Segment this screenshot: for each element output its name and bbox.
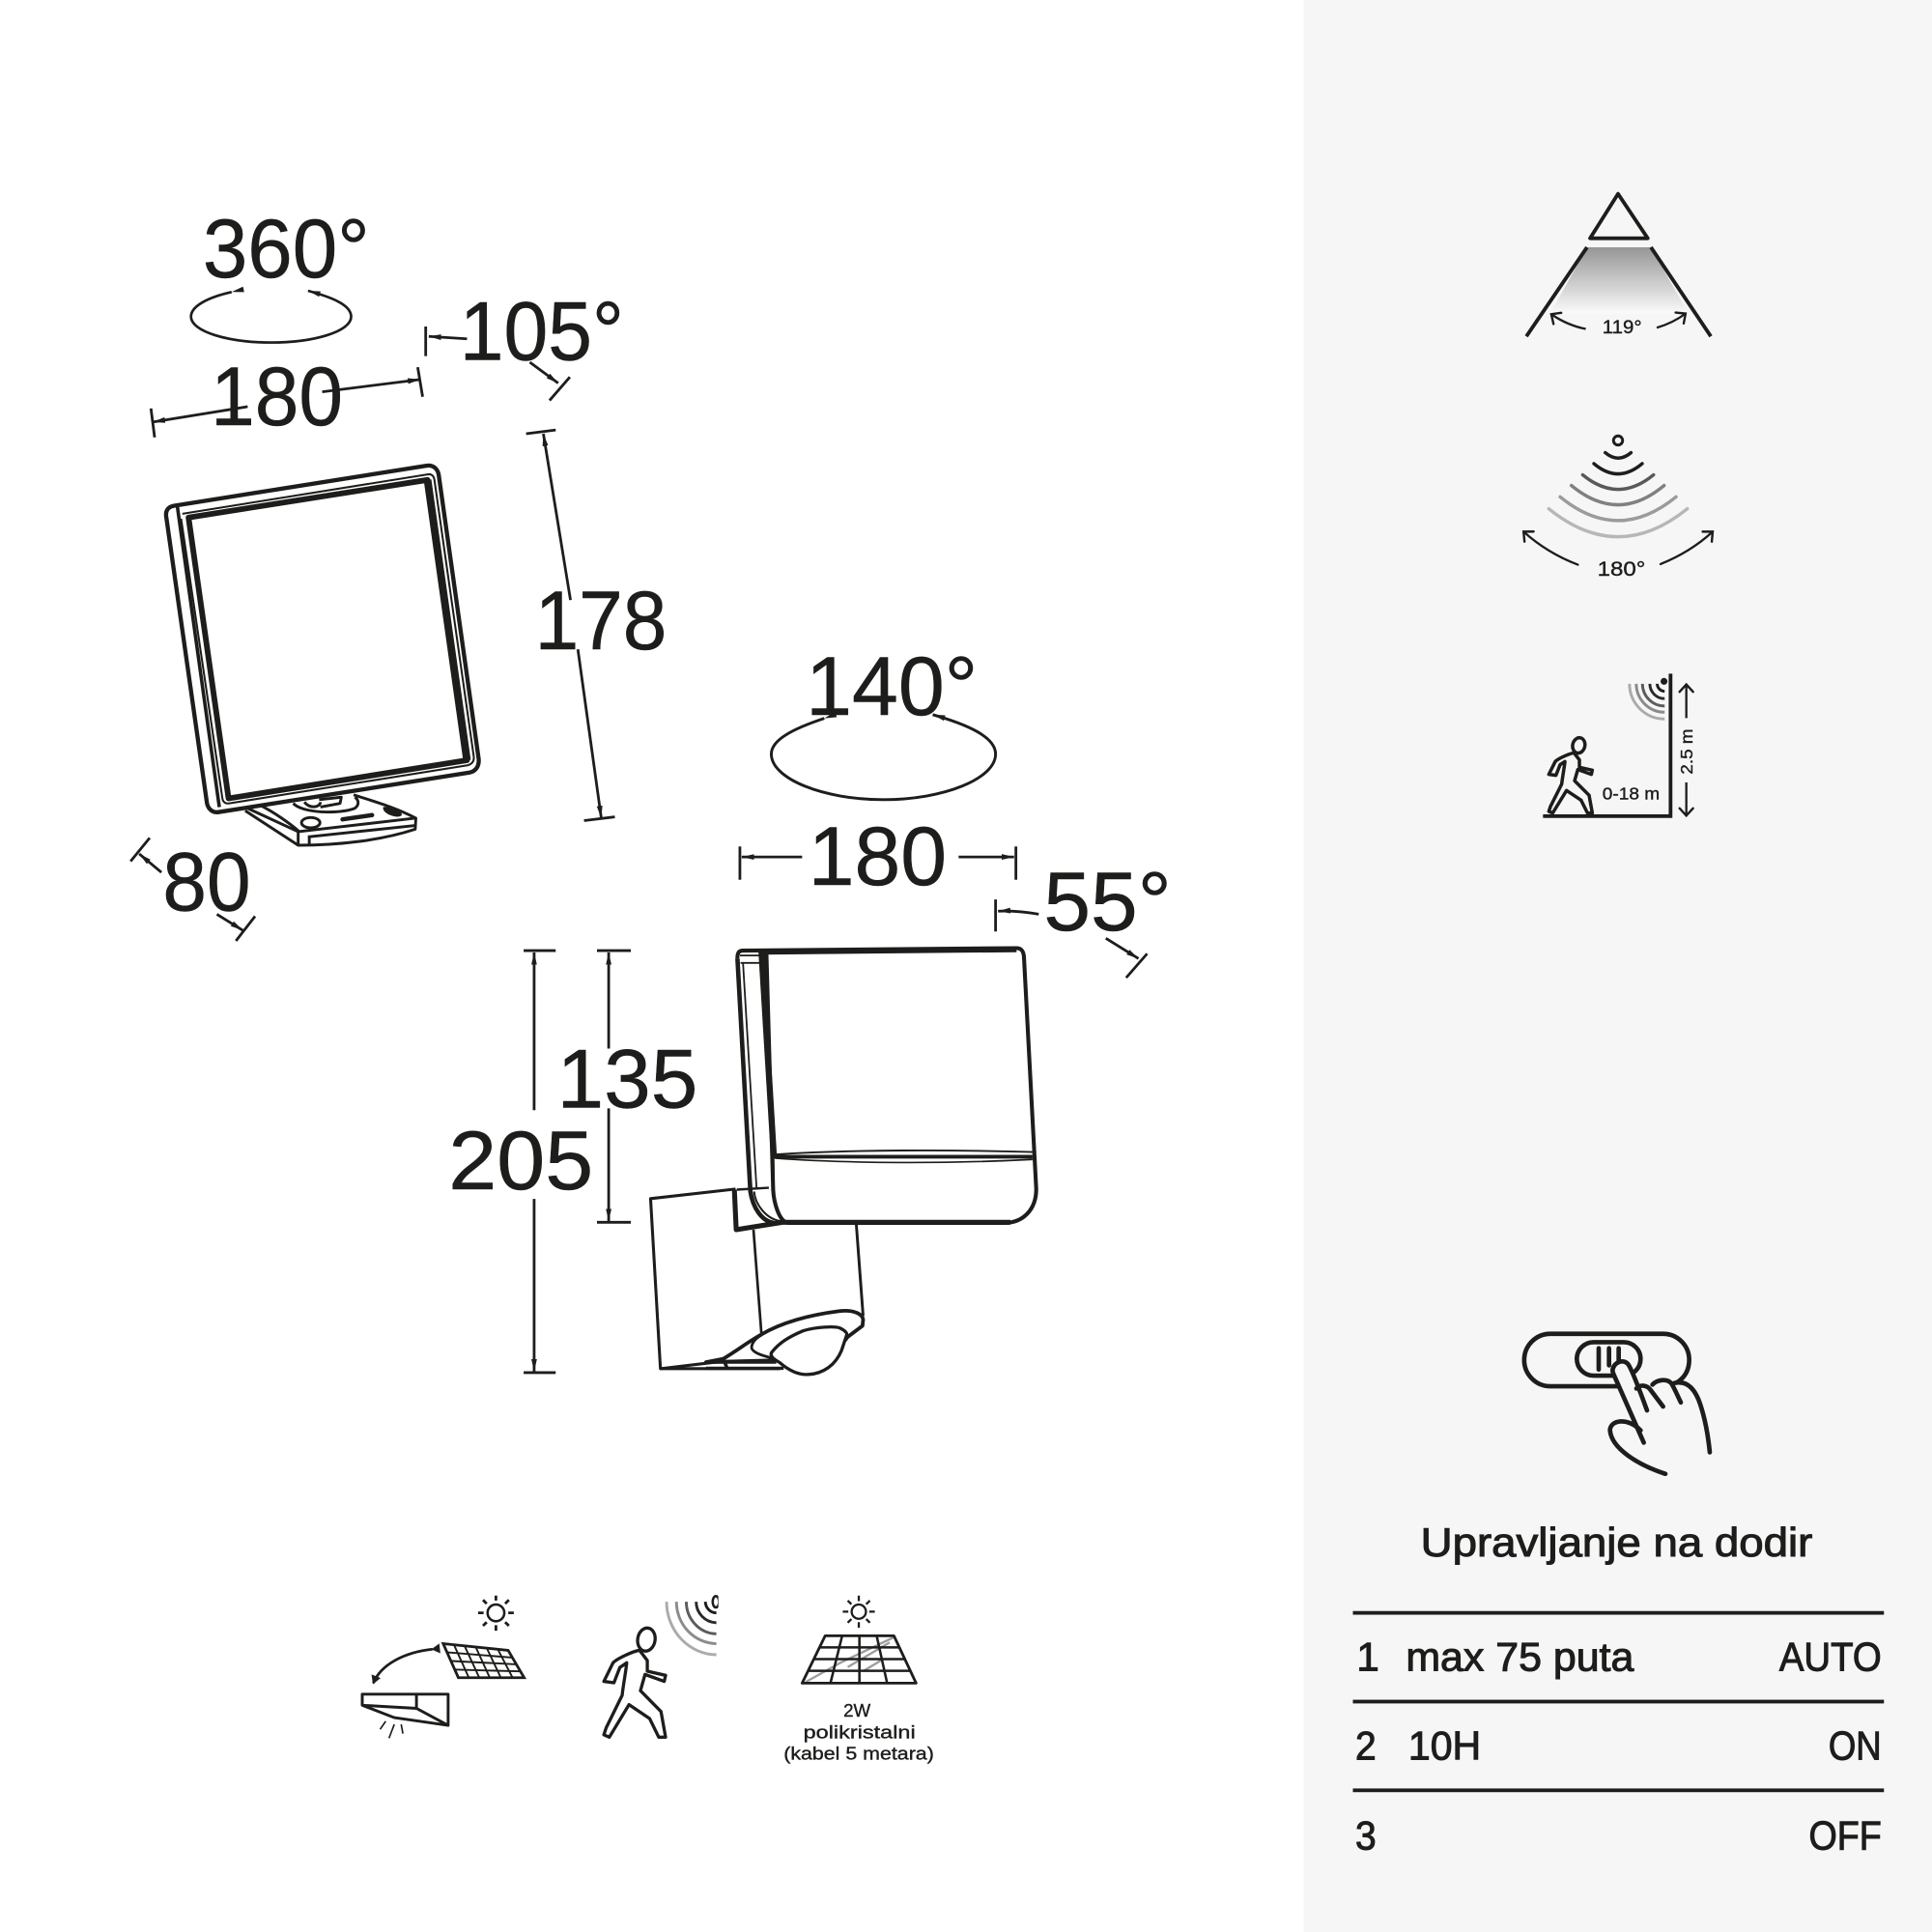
sensor dot — [1613, 436, 1623, 445]
panel grid — [802, 1635, 916, 1683]
right side panel background — [1303, 0, 1932, 1932]
tilt label 55 degrees — [996, 855, 1172, 978]
light rays — [380, 1721, 403, 1738]
hand — [1610, 1361, 1710, 1474]
sweep label: 180° — [1598, 558, 1645, 581]
diagram: floodlight fixture with dimensions — [448, 639, 1172, 1375]
table rule 3 — [1353, 1788, 1884, 1792]
row 2 — [1355, 1722, 1882, 1768]
height dimension 178 — [526, 430, 667, 820]
height dimension 205 — [448, 951, 593, 1373]
row 2: ON — [1829, 1722, 1882, 1768]
panel diagonals — [806, 1637, 894, 1682]
wall and floor — [1543, 673, 1670, 816]
walking person — [1548, 736, 1592, 813]
panel caption — [783, 1700, 934, 1763]
diagram: solar panel with dimensions — [130, 202, 667, 941]
height dimension 178: 178 — [535, 574, 667, 668]
depth dimension 80: 80 — [162, 836, 251, 929]
sun — [478, 1596, 514, 1631]
row 2: 2 — [1355, 1722, 1377, 1768]
motion sensor — [706, 1311, 863, 1375]
height dimension 135 — [557, 951, 697, 1222]
icon: separate solar panel and lamp — [362, 1596, 525, 1738]
width dimension 180: 180 — [211, 350, 343, 443]
lamp — [362, 1694, 448, 1725]
rotation label 140 degrees: 140° — [806, 639, 978, 733]
angle label: 119° — [1603, 317, 1642, 338]
width dimension 180 — [151, 350, 423, 443]
switch housing — [1524, 1334, 1690, 1386]
icon: walking person with motion waves — [604, 1596, 719, 1737]
sonar arcs — [1548, 453, 1688, 537]
row 1: 1 — [1356, 1634, 1379, 1680]
icon: detection range and height — [1543, 673, 1696, 816]
sun — [842, 1596, 875, 1628]
person — [604, 1627, 666, 1737]
table: touch control modes — [1353, 1611, 1884, 1859]
tilt label 105 degrees: 105° — [460, 284, 624, 378]
height dimension 135: 135 — [557, 1033, 697, 1126]
height arrows — [1686, 685, 1688, 815]
inner pill — [1577, 1342, 1640, 1376]
solar panel body — [166, 466, 479, 812]
panel base stand — [245, 795, 415, 845]
panel caption: 2W — [843, 1700, 871, 1720]
panel caption: (kabel 5 metara) — [783, 1743, 934, 1763]
beam gradient — [1550, 247, 1689, 314]
angle arrows — [1551, 314, 1686, 329]
icon: polycrystalline solar panel — [783, 1596, 934, 1763]
height dimension 205: 205 — [448, 1114, 593, 1208]
row 3: OFF — [1808, 1813, 1882, 1859]
double arrow — [373, 1649, 433, 1683]
height label: 2.5 m — [1677, 728, 1696, 775]
row 1: AUTO — [1779, 1634, 1882, 1680]
rotation label 360 degrees: 360° — [203, 202, 370, 296]
mini solar panel — [443, 1644, 525, 1678]
row 1: max 75 puta — [1406, 1634, 1634, 1680]
row 2: 10H — [1408, 1722, 1481, 1768]
icon: 180 degree motion detection — [1523, 436, 1713, 581]
switch lines — [1599, 1349, 1619, 1370]
lower body and arm — [650, 1189, 863, 1369]
tilt label 55 degrees: 55° — [1043, 855, 1172, 949]
table rule 1 — [1353, 1611, 1884, 1615]
heading: touch control: Upravljanje na dodir — [1421, 1520, 1812, 1565]
rotation ellipse arrow — [191, 291, 352, 343]
lamp triangle — [1590, 194, 1648, 239]
sweep arrows — [1523, 531, 1713, 565]
range label: 0-18 m — [1603, 784, 1660, 804]
floodlight head — [734, 949, 1037, 1230]
row 3: 3 — [1355, 1813, 1377, 1859]
beam edges — [1526, 247, 1711, 336]
table rule 2 — [1353, 1700, 1884, 1703]
row 3 — [1355, 1813, 1882, 1859]
panel caption: polikristalni — [804, 1722, 916, 1743]
row 1 — [1356, 1634, 1882, 1680]
width dimension 180: 180 — [809, 810, 947, 903]
depth dimension 80 — [130, 836, 255, 941]
sensor waves — [1630, 678, 1667, 719]
waves — [667, 1596, 719, 1655]
icon: touch switch with hand — [1524, 1334, 1710, 1474]
tilt label 105 degrees — [426, 284, 624, 401]
rotation ellipse arrow — [771, 715, 996, 800]
icon: 119 degree light beam — [1526, 194, 1711, 338]
